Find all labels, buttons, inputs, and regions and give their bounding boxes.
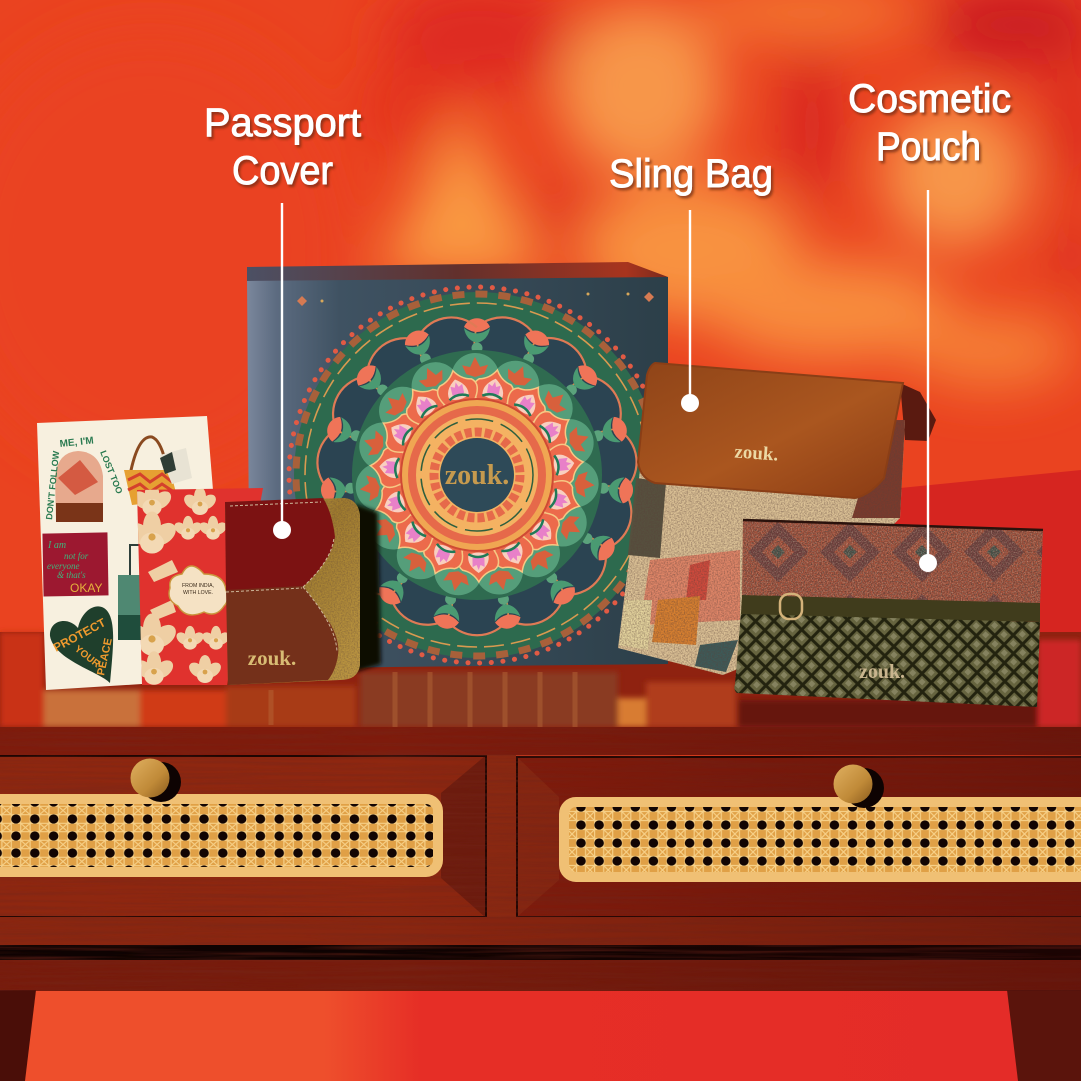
card message plaque: FROM INDIA,: [182, 583, 214, 589]
sticker: backpack: LOST TOO: [98, 449, 125, 495]
sticker: protect your peace heart: YOUR: [72, 644, 102, 671]
passport logo: zouk.: [248, 646, 296, 670]
box corner ornaments: [297, 292, 654, 306]
floral card: [137, 488, 263, 685]
cane panel right: [564, 802, 1081, 877]
right drawer: [517, 757, 1081, 917]
sling fabric body: [618, 420, 905, 675]
sticker: protect your peace heart: PEACE: [95, 637, 115, 677]
pointer: cosmetic pouch: [919, 190, 937, 572]
card flowers: [137, 489, 228, 685]
left drawer: [0, 755, 486, 917]
sling strap: [900, 383, 936, 441]
sticker: not for everyone: OKAY: [70, 581, 102, 595]
sticker: not for everyone: [42, 532, 109, 597]
sticker: not for everyone: & that's: [57, 570, 86, 580]
card message plaque: WITH LOVE.: [183, 590, 213, 596]
label: sling bag: [609, 152, 773, 412]
pouch band: [741, 595, 1040, 622]
navy arches: [311, 307, 645, 642]
sticker: luggage: [118, 545, 142, 640]
label: sling bag: Sling Bag: [609, 152, 773, 196]
passport cover shadow: [355, 504, 381, 672]
lower rails: [0, 917, 1081, 991]
light green lobes: [353, 353, 601, 599]
table top surface: [0, 632, 1081, 727]
mandala: [289, 287, 665, 663]
sling leather flap: [638, 363, 903, 498]
sticker sheet: [37, 416, 213, 690]
left knob: [130, 758, 181, 802]
label: cosmetic pouch: Cosmetic: [848, 77, 1011, 121]
label: passport cover: Cover: [232, 149, 333, 193]
outer green ring: [289, 287, 665, 663]
pouch kilim fabric: [742, 520, 1043, 605]
sticker: not for everyone: not for: [64, 551, 89, 561]
right leg: [1007, 990, 1081, 1081]
sticker: backpack: DON'T FOLLOW: [44, 450, 61, 520]
left leg: [0, 990, 36, 1081]
sticker: protect your peace heart: PROTECT: [51, 615, 109, 655]
sticker: not for everyone: everyone: [47, 561, 79, 571]
label: passport cover: Passport: [204, 101, 361, 145]
cane panel left: [0, 799, 438, 872]
sling bag: [618, 363, 936, 675]
lotus petals: [369, 366, 586, 582]
pointer: passport cover: [273, 203, 291, 539]
central rings: [401, 399, 553, 551]
dark green disc: [352, 350, 602, 600]
table reflections: [0, 632, 1081, 727]
cosmetic pouch: [734, 520, 1043, 707]
label: cosmetic pouch: [848, 77, 1011, 572]
table front edge: [0, 727, 1081, 755]
sticker: protect your peace heart: [50, 606, 115, 683]
table: [0, 632, 1081, 1081]
sticker: not for everyone: I am: [47, 540, 66, 551]
gift box: [247, 262, 668, 668]
card message plaque: [169, 566, 228, 615]
pouch logo: zouk.: [859, 661, 905, 683]
sticker: backpack: ME, I'M: [59, 435, 94, 450]
pouch buckle: [780, 594, 802, 619]
sticker: backpack: [44, 435, 125, 522]
sticker: tote bag: [124, 437, 192, 505]
right knob: [834, 764, 884, 808]
sling logo: zouk.: [734, 442, 779, 466]
pointer: sling bag: [681, 210, 699, 412]
box logo: zouk.: [445, 460, 509, 491]
label: cosmetic pouch: Pouch: [876, 125, 981, 169]
arch motifs: [311, 307, 645, 642]
label: passport cover: [204, 101, 361, 539]
pouch woven panel: [734, 612, 1040, 707]
table post: [487, 755, 516, 917]
passport cover: [225, 498, 360, 685]
